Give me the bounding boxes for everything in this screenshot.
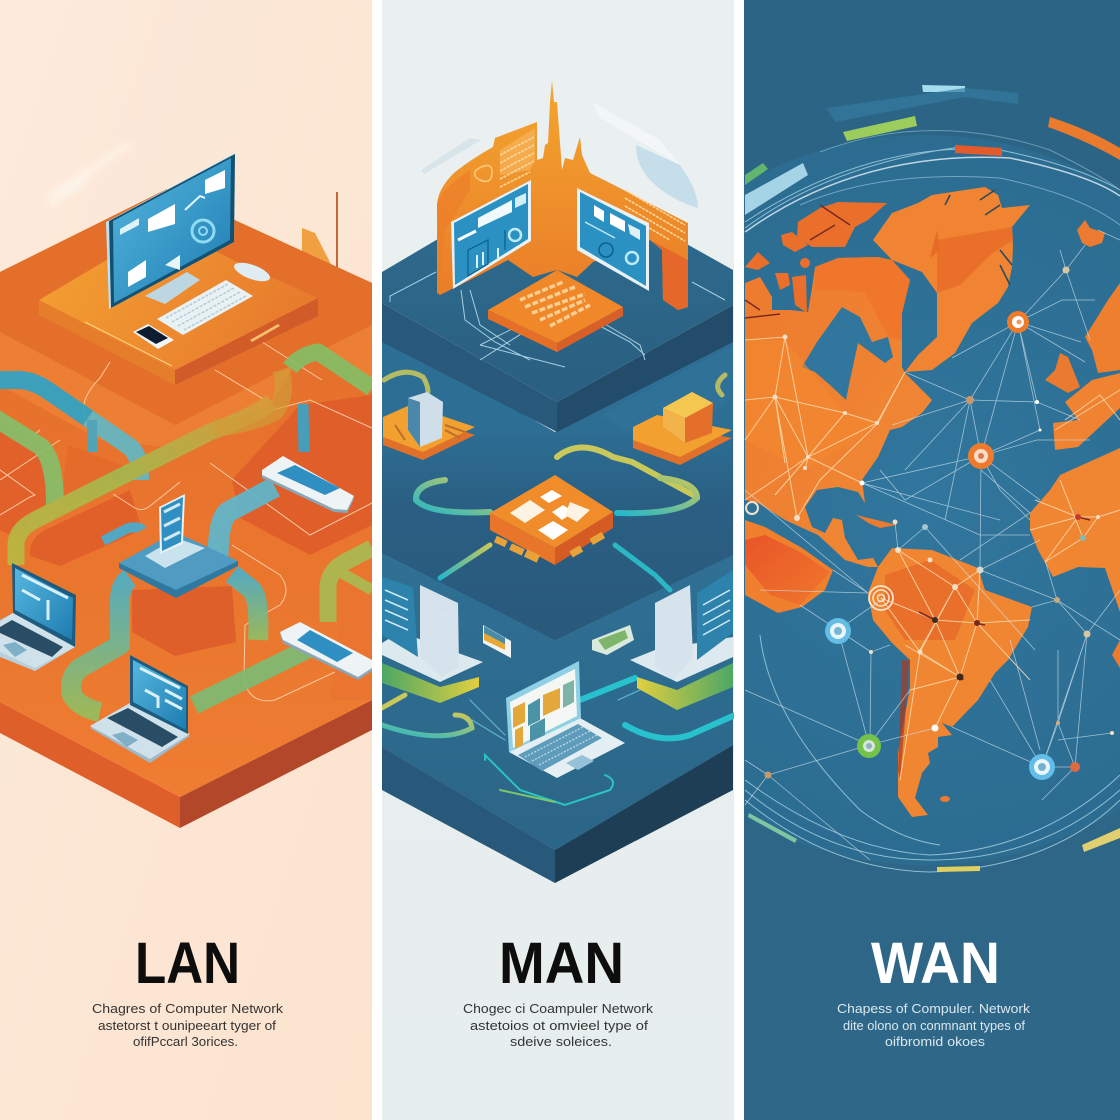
WAN heading: WAN [871, 931, 1000, 996]
icon: small card right [592, 625, 634, 655]
map: Greenland [873, 187, 1030, 372]
decorative clouds [421, 102, 698, 208]
WAN description: oifbromid okoes [885, 1034, 986, 1049]
network lines over ocean [745, 230, 1120, 860]
screen right [577, 188, 649, 291]
city skyline [437, 80, 688, 310]
center chip lower [490, 475, 613, 565]
WAN description [837, 1001, 1031, 1049]
MAN heading: MAN [499, 931, 624, 996]
node: orange atlantic [968, 443, 994, 469]
MAN description: astetoios ot omvieel type of [470, 1018, 648, 1033]
node: blue pacific [825, 618, 851, 644]
map: Pacific landmass [745, 520, 833, 613]
LAN heading: LAN [135, 931, 240, 996]
icon: keyboard [157, 280, 253, 335]
Hudson Bay [802, 307, 893, 400]
icon: laptop [506, 661, 625, 778]
map: Scandinavia [1085, 283, 1120, 373]
map: Europe mainland [1053, 373, 1120, 450]
dark land creases [745, 205, 1090, 680]
decorative light streak top left [50, 145, 128, 204]
icon: storage box right [633, 392, 732, 465]
bar red [955, 145, 1002, 156]
map: Africa [1030, 448, 1120, 612]
fine circuit lines [0, 342, 372, 701]
chip connectors [494, 532, 605, 563]
MAN upper platform [382, 240, 733, 432]
map: Britain [1045, 353, 1080, 393]
node: blue south atlantic [1029, 754, 1055, 780]
icon: server tile left [383, 392, 475, 460]
icon: server lower left [382, 577, 483, 703]
bar green bottom left [748, 813, 797, 843]
MAN description [463, 1001, 654, 1049]
center chip upper [488, 270, 623, 352]
node: orange north [1007, 311, 1029, 333]
map: Canadian arctic islands [745, 202, 887, 313]
icon: laptop bottom [90, 655, 190, 763]
MAN description: Chogec ci Coampuler Network [463, 1001, 654, 1016]
map: East Africa edge [1112, 640, 1120, 668]
WAN description: dite olono on conmnant types of [843, 1018, 1025, 1033]
map: South America [868, 548, 1032, 817]
raised desk [39, 252, 318, 385]
bar teal faint [827, 88, 1018, 122]
icon: mouse [234, 262, 270, 282]
MAN lower platform [382, 335, 733, 883]
MAN description: sdeive soleices. [510, 1034, 612, 1049]
map: Caribbean islands [856, 515, 897, 528]
node: green [857, 734, 881, 758]
bar pale blue left [745, 163, 808, 215]
bar green top [843, 116, 917, 141]
icon: desktop monitor [106, 153, 235, 309]
node: ring left edge [746, 502, 758, 514]
small network nodes [764, 266, 1114, 778]
bar green left [745, 163, 768, 185]
WAN description: Chapess of Compuler. Network [837, 1001, 1031, 1016]
LAN panel background [0, 0, 372, 1120]
icon: phone upper right [262, 456, 354, 513]
LAN description: astetorst t ounipeeart tyger of [98, 1018, 276, 1033]
bar orange right [1048, 117, 1120, 160]
circuit lines [390, 272, 725, 367]
bar yellow bottom center [937, 866, 980, 872]
icon: folder behind platform [302, 192, 338, 274]
panel: WAN [560, 0, 1120, 1120]
network ribbons [0, 352, 372, 712]
LAN description [92, 1004, 283, 1046]
icon: tablet on stand [119, 494, 238, 598]
icon: server lower right [630, 570, 733, 710]
LAN description: Chagres of Computer Network [92, 1001, 284, 1016]
arc highlight bars [745, 85, 1120, 872]
globe disc [560, 135, 1120, 865]
LAN description: ofifPccarl 3orices. [133, 1034, 238, 1049]
panel: MAN [382, 0, 735, 1120]
MAN ribbons [382, 372, 735, 805]
bar yellow bottom right [1082, 828, 1120, 852]
icon: laptop left [0, 563, 76, 671]
map: North America and Central America [745, 257, 932, 567]
map: Falkland island [940, 796, 950, 802]
network lines over land [745, 337, 1120, 780]
bar pale blue top [922, 85, 965, 92]
panel: LAN [0, 0, 372, 1120]
map: Iceland [1077, 220, 1105, 247]
LAN isometric platform [0, 189, 372, 828]
WAN panel background [744, 0, 1120, 1120]
screen left [451, 180, 531, 289]
icon: smartphone on desk [133, 324, 174, 349]
orbit rings [745, 130, 1120, 872]
MAN panel background [382, 0, 734, 1120]
icon: small card left [483, 625, 511, 658]
icon: phone lower right [280, 622, 372, 680]
node: orange rings on South America [869, 586, 893, 610]
